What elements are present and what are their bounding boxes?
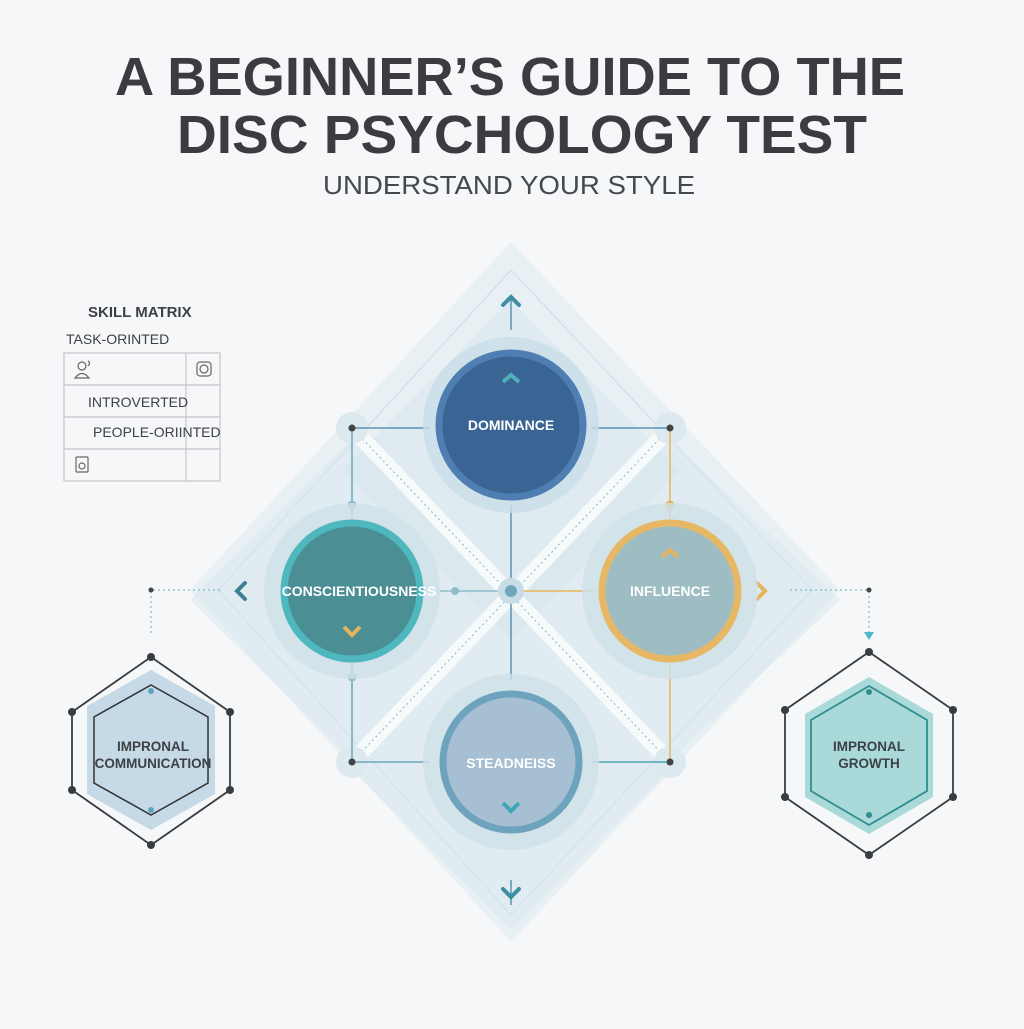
hexagon: impronal growth: IMPRONAL [833,739,905,754]
circle: steadiness: STEADNEISS [466,755,556,771]
arrow: left [237,583,245,599]
left dotted connector [148,588,220,635]
arrow: right [757,583,765,599]
circle: influence [582,503,758,679]
hexagon: impronal communication: COMMUNICATION [95,756,211,771]
circle: steadiness [423,674,599,850]
subtitle: UNDERSTAND YOUR STYLE [323,170,695,200]
hexagon: impronal communication: IMPRONAL [117,739,189,754]
title: DISC PSYCHOLOGY TEST [177,105,867,165]
icon: person [75,361,90,378]
title: A BEGINNER’S GUIDE TO THE [115,47,905,107]
arrow: bottom [503,889,519,897]
circle: conscientiousness [264,503,440,679]
background diamonds [190,242,840,942]
icon: clipboard [76,457,88,472]
skill matrix: PEOPLE-ORIINTED [93,424,221,440]
skill matrix: TASK-ORINTED [66,331,169,347]
hexagon: impronal growth [781,648,957,859]
connectors [336,300,686,905]
skill matrix: INTROVERTED [88,394,188,410]
icon: globe [197,362,211,376]
circle: dominance: DOMINANCE [468,417,554,433]
circle: conscientiousness: CONSCIENTIOUSNESS [282,583,436,599]
arrow: top [503,297,519,305]
hexagon: impronal communication [68,653,234,849]
title [115,47,905,165]
circle: dominance [423,337,599,513]
circle: influence: INFLUENCE [630,583,710,599]
hexagon: impronal growth: GROWTH [838,756,900,771]
skill matrix: SKILL MATRIX [88,304,192,321]
skill matrix [64,304,221,481]
right dotted connector [790,588,874,640]
